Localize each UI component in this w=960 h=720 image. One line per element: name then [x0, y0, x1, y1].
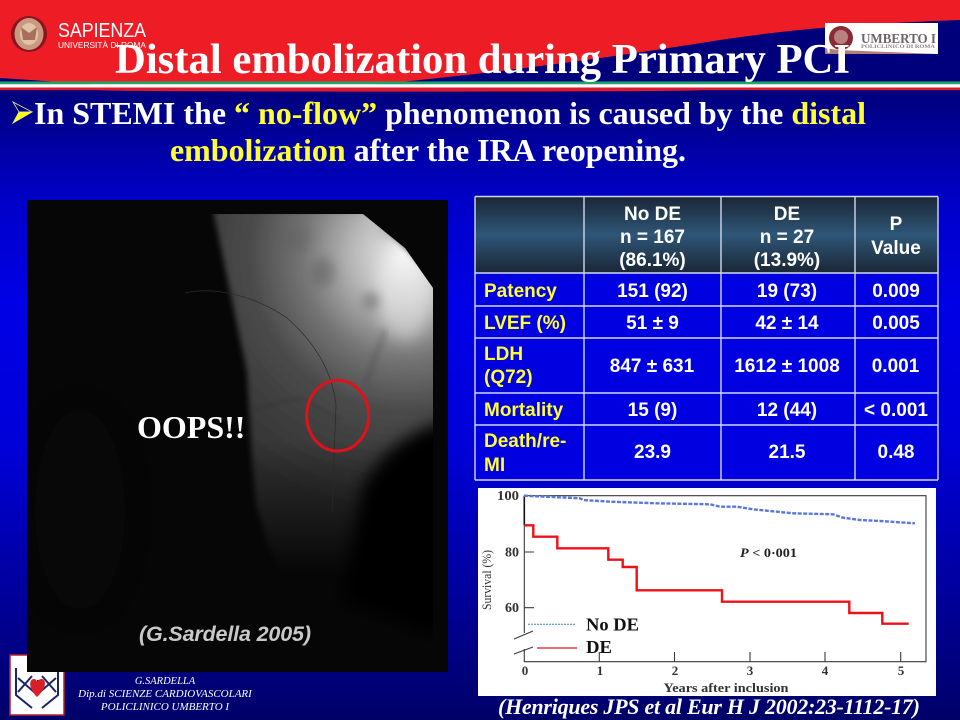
header banner	[0, 0, 960, 92]
logo: Policlinico Umberto I: POLICLINICO DI ROMA	[861, 45, 935, 50]
image credit: (G.Sardella 2005)	[139, 622, 311, 646]
row: LVEF: 42 ± 14	[755, 313, 819, 334]
x axis labels: 4	[822, 663, 829, 678]
row: LDH: (Q72)	[484, 367, 533, 388]
row: patency	[484, 281, 920, 302]
logo: Policlinico Umberto I: UMBERTO I	[861, 32, 936, 47]
table header row: n = 27	[760, 227, 814, 248]
logo: Sapienza university: UNIVERSITÀ DI ROMA	[58, 40, 146, 50]
intro bullet text	[13, 95, 866, 168]
bullet line 2: embolization after the IRA reopening.	[170, 132, 686, 168]
row: mortality: 12 (44)	[757, 400, 817, 421]
footer credit: G.SARDELLA	[135, 676, 196, 687]
oops label: OOPS!!	[137, 409, 245, 445]
table header row: DE	[774, 204, 800, 225]
footer credit: POLICLINICO UMBERTO I	[100, 701, 230, 713]
y axis labels: 60	[505, 601, 519, 616]
y axis labels: 100	[497, 489, 519, 504]
logo: Sapienza university: SAPIENZA	[58, 20, 147, 42]
row: LVEF: 51 ± 9	[626, 313, 679, 334]
row: death/re-MI: 0.48	[878, 442, 914, 463]
y axis labels	[479, 489, 519, 616]
footer credit: Dip.di SCIENZE CARDIOVASCOLARI	[77, 688, 253, 700]
row: patency: 0.009	[872, 281, 920, 302]
table header row: Value	[871, 238, 921, 259]
title: Distal embolization during Primary PCI	[115, 36, 850, 83]
row: patency: Patency	[484, 281, 557, 302]
row: death/re-MI	[484, 431, 914, 476]
row: LVEF: LVEF (%)	[484, 313, 566, 334]
y axis labels: 80	[505, 546, 519, 560]
red circle marker	[307, 380, 369, 451]
row: LVEF: 0.005	[872, 313, 920, 334]
row: death/re-MI: 21.5	[769, 442, 806, 463]
x axis labels: 5	[898, 663, 905, 678]
logo: Policlinico Umberto I	[825, 23, 938, 54]
footer credit	[77, 676, 253, 713]
row: death/re-MI: 23.9	[634, 442, 671, 463]
x axis labels	[522, 663, 905, 695]
legend: No DE	[586, 614, 639, 634]
row: LVEF	[484, 313, 920, 334]
row: LDH: 1612 ± 1008	[734, 356, 840, 377]
table header row: P	[890, 214, 903, 235]
table header row: (13.9%)	[754, 250, 820, 271]
row: LDH	[484, 344, 920, 388]
citation: (Henriques JPS et al Eur H J 2002:23-1112-17)	[498, 694, 920, 719]
table header row: n = 167	[620, 227, 685, 248]
row: mortality	[484, 400, 928, 421]
chart: survival curve	[478, 488, 936, 696]
x axis labels: 2	[672, 663, 678, 678]
chart axes	[514, 496, 926, 662]
logo: Sapienza university	[11, 16, 147, 52]
row: death/re-MI: Death/re-	[484, 431, 566, 452]
y axis labels: Survival (%)	[479, 550, 494, 610]
x axis labels: Years after inclusion	[664, 680, 789, 695]
panel: angiogram image	[27, 200, 450, 672]
x axis labels: 3	[747, 663, 754, 678]
legend: DE	[586, 637, 612, 657]
row: mortality: < 0.001	[864, 400, 928, 421]
p value: P < 0·001	[740, 545, 797, 560]
row: LDH: 847 ± 631	[610, 356, 695, 377]
curve: DE	[524, 525, 909, 624]
x axis labels: 1	[597, 663, 603, 678]
table header row	[619, 204, 921, 271]
table: outcomes by distal embolization	[475, 196, 938, 480]
row: mortality: Mortality	[484, 400, 564, 421]
row: mortality: 15 (9)	[628, 400, 677, 421]
x axis labels: 0	[522, 663, 528, 678]
table header row: No DE	[624, 204, 681, 225]
row: patency: 151 (92)	[617, 281, 688, 302]
row: LDH: LDH	[484, 344, 523, 365]
table header row: (86.1%)	[619, 250, 686, 271]
logo: cardiology heart emblem	[10, 655, 64, 715]
row: death/re-MI: MI	[484, 455, 505, 476]
row: LDH: 0.001	[872, 356, 920, 377]
curve: no DE	[524, 496, 915, 523]
bullet line 1: In STEMI the “ no-flow” phenomenon is caused by the distal	[34, 95, 866, 131]
row: patency: 19 (73)	[757, 281, 817, 302]
legend	[528, 614, 639, 657]
icon: arrow bullet	[13, 102, 32, 123]
